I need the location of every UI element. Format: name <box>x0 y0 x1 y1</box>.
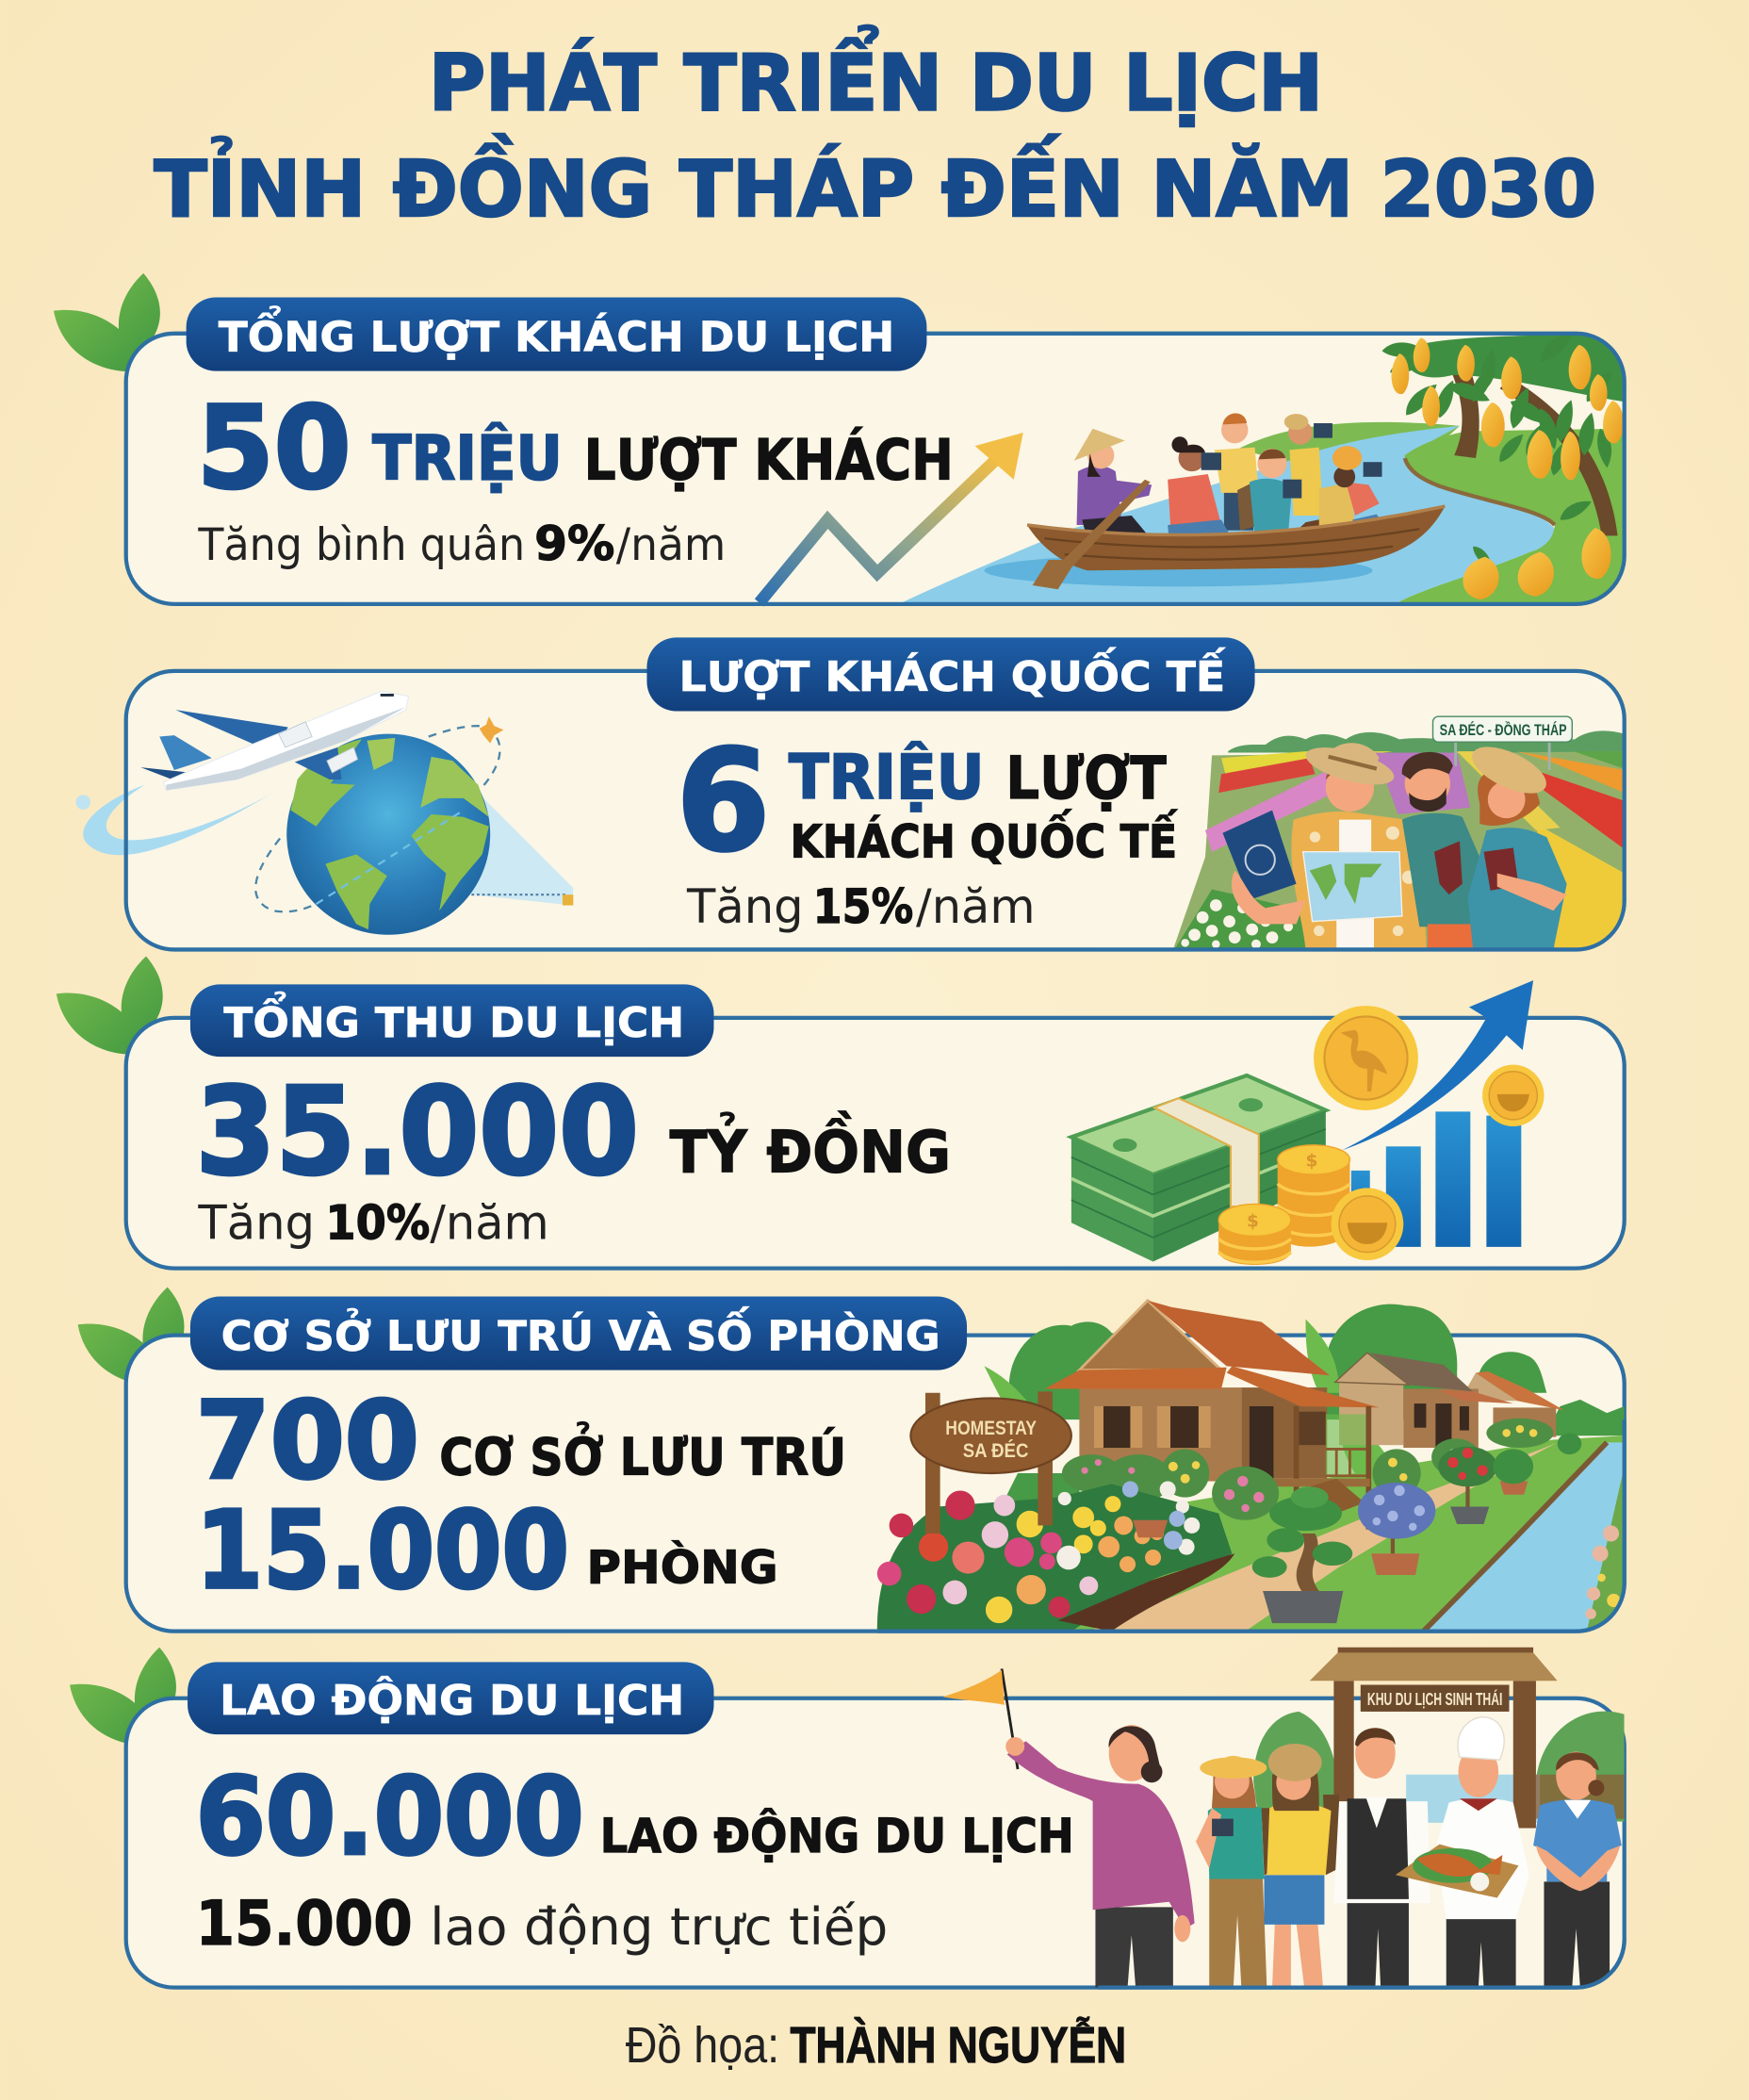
illustration: money stack <box>1071 1075 1326 1262</box>
treeline <box>1228 730 1625 753</box>
wooden boat <box>1027 506 1445 570</box>
flower rows <box>1173 751 1625 949</box>
background scene <box>1253 1712 1625 1823</box>
icon: leaves <box>70 1648 176 1746</box>
panel: lao động du lịch <box>70 1648 1625 1988</box>
heading pill <box>188 1662 713 1734</box>
growth note: 9% <box>534 517 614 571</box>
footer credit <box>626 2016 1126 2074</box>
sign: Homestay Sa Đéc <box>910 1391 1071 1534</box>
airplane <box>140 691 409 790</box>
illustration: tourism workers <box>942 1648 1625 1988</box>
illustration: tourists in flower fields <box>1173 730 1625 949</box>
stat: 6 triệu lượt khách quốc tế: KHÁCH QUỐC TẾ <box>790 809 1178 868</box>
footer credit: Đồ họa: <box>626 2017 779 2074</box>
coin stacks: $ <box>1306 1152 1317 1172</box>
heading pill <box>190 1296 967 1370</box>
rising arrow <box>1342 980 1533 1151</box>
card bottom edge <box>1098 1939 1625 1988</box>
note: lao động trực tiếp <box>196 1888 888 1960</box>
panel: tổng lượt khách du lịch <box>54 273 1625 605</box>
illustration: plane and globe <box>75 691 573 935</box>
mangoes on the bank <box>1463 501 1611 599</box>
growth arrow <box>760 433 1023 602</box>
potted plants <box>1133 1433 1581 1623</box>
bar chart <box>1351 1111 1521 1247</box>
stat: 6 triệu lượt khách quốc tế: LƯỢT <box>1005 744 1167 812</box>
stat: 15.000 phòng: 15.000 <box>196 1487 569 1613</box>
sign: Homestay Sa Đéc: SA ĐÉC <box>963 1438 1028 1462</box>
card <box>126 334 1625 604</box>
staff in blue <box>1533 1752 1622 1988</box>
footer credit: THÀNH NGUYỄN <box>790 2016 1126 2074</box>
growth note: /năm <box>616 519 726 571</box>
stat: 60.000 lao động du lịch <box>196 1754 1074 1879</box>
swoosh <box>75 785 282 855</box>
sign: Homestay Sa Đéc: HOMESTAY <box>945 1417 1037 1439</box>
chef <box>1435 1717 1529 1988</box>
stat: 50 triệu lượt khách: TRIỆU <box>372 421 563 495</box>
card border <box>126 671 1625 949</box>
illustration: boat on river with mango trees <box>896 327 1625 605</box>
panel: lượt khách quốc tế <box>75 637 1625 949</box>
stat: 50 triệu lượt khách: 50 <box>197 383 351 515</box>
water shadow <box>984 558 1372 586</box>
note: lao động trực tiếp: lao động trực tiếp <box>430 1897 888 1957</box>
banana leaves <box>985 1320 1399 1486</box>
illustration: homestay garden <box>877 1301 1625 1632</box>
stat: 60.000 lao động du lịch: 60.000 <box>196 1754 584 1879</box>
path <box>1088 1442 1558 1632</box>
growth note: /năm <box>430 1195 549 1250</box>
card <box>126 1336 1625 1632</box>
coin: noodle bowl large <box>1332 1188 1403 1260</box>
coin stacks <box>1218 1145 1349 1265</box>
main house <box>1044 1301 1380 1530</box>
growth note: Tăng bình quân <box>197 519 525 571</box>
card <box>126 1698 1625 1988</box>
title: PHÁT TRIỂN DU LỊCH <box>429 25 1323 129</box>
card <box>126 671 1625 949</box>
stat: 6 triệu lượt khách quốc tế: 6 <box>677 720 770 882</box>
sign: khu du lịch sinh thái <box>1361 1685 1510 1712</box>
title <box>155 25 1596 235</box>
route triangle <box>471 798 573 906</box>
icon: leaves <box>78 1288 184 1386</box>
globe <box>286 734 490 935</box>
stat: 15.000 phòng: PHÒNG <box>587 1541 778 1595</box>
heading pill: CƠ SỞ LƯU TRÚ VÀ SỐ PHÒNG <box>221 1305 940 1360</box>
icon: leaves <box>54 273 160 371</box>
flower shrubs near house <box>1062 1419 1553 1520</box>
note: lao động trực tiếp: 15.000 <box>196 1888 413 1960</box>
woman with book <box>1465 737 1567 949</box>
guide in purple <box>1005 1725 1195 1988</box>
growth note <box>686 879 1036 934</box>
dashed flight path <box>255 726 499 911</box>
stat: 35.000 tỷ đồng <box>196 1062 951 1203</box>
background trees <box>1006 1304 1625 1501</box>
man with passport and map <box>1222 740 1426 949</box>
card <box>126 1018 1625 1269</box>
growth note <box>197 517 726 571</box>
sign: khu du lịch sinh thái: KHU DU LỊCH SINH THÁI <box>1367 1689 1502 1709</box>
river <box>896 426 1555 605</box>
stat: 700 cơ sở lưu trú: 700 <box>196 1377 419 1502</box>
bearded man with book <box>1402 752 1479 949</box>
coin stacks: $ <box>1247 1212 1259 1232</box>
far river bank <box>1238 422 1460 462</box>
sign: Sa Đéc - Đồng Tháp: SA ĐÉC - ĐỒNG THÁP <box>1440 721 1567 739</box>
stat: 35.000 tỷ đồng: TỶ ĐỒNG <box>670 1111 951 1186</box>
growth note <box>197 1195 549 1250</box>
stat: 6 triệu lượt khách quốc tế: TRIỆU <box>789 740 985 813</box>
panel: tổng thu du lịch <box>57 957 1625 1269</box>
sign: Sa Đéc - Đồng Tháp <box>1433 716 1572 770</box>
tourists on boat <box>1074 414 1386 541</box>
flag <box>942 1668 1018 1769</box>
heading pill <box>187 297 926 371</box>
waiter <box>1333 1728 1430 1988</box>
stat: 6 triệu lượt khách quốc tế <box>677 720 1178 882</box>
near bank <box>1393 429 1625 605</box>
lawn <box>1071 1436 1625 1632</box>
icon: leaves <box>57 957 163 1055</box>
stat: 50 triệu lượt khách <box>197 383 954 515</box>
oar <box>1033 480 1151 589</box>
stat: 700 cơ sở lưu trú: CƠ SỞ LƯU TRÚ <box>439 1422 846 1486</box>
heading pill: TỔNG LƯỢT KHÁCH DU LỊCH <box>219 304 894 361</box>
gate <box>1310 1648 1558 1829</box>
stat: 60.000 lao động du lịch: LAO ĐỘNG DU LỊCH <box>600 1808 1074 1863</box>
stat: 35.000 tỷ đồng: 35.000 <box>196 1062 639 1203</box>
heading pill: LAO ĐỘNG DU LỊCH <box>220 1675 684 1725</box>
mango tree <box>1382 327 1625 535</box>
tourist with backpack <box>1264 1744 1339 1988</box>
coin: heron <box>1314 1006 1418 1110</box>
river <box>1424 1442 1625 1632</box>
heading pill <box>190 984 713 1057</box>
growth note: 10% <box>325 1195 430 1250</box>
tourist with camera <box>1196 1756 1272 1988</box>
heading pill: TỔNG THU DU LỊCH <box>223 991 684 1047</box>
coin: noodle bowl small <box>1482 1065 1544 1126</box>
card border <box>126 334 1625 604</box>
growth note: /năm <box>916 879 1036 934</box>
card bottom edge <box>877 1419 1625 1632</box>
title: TỈNH ĐỒNG THÁP ĐẾN NĂM 2030 <box>155 134 1596 235</box>
panel: cơ sở lưu trú và số phòng <box>78 1288 1625 1632</box>
growth note: Tăng <box>686 879 804 934</box>
tray with fish <box>1396 1845 1518 1897</box>
growth note: 15% <box>813 879 913 934</box>
heading pill <box>646 637 1255 712</box>
rose and flower beds <box>877 1482 1234 1632</box>
heading pill: LƯỢT KHÁCH QUỐC TẾ <box>679 647 1226 701</box>
growth note: Tăng <box>197 1195 315 1250</box>
stat: 700 cơ sở lưu trú <box>196 1377 846 1502</box>
star marker <box>480 716 503 744</box>
far houses <box>1335 1353 1564 1449</box>
stat: 50 triệu lượt khách: LƯỢT KHÁCH <box>584 427 954 494</box>
